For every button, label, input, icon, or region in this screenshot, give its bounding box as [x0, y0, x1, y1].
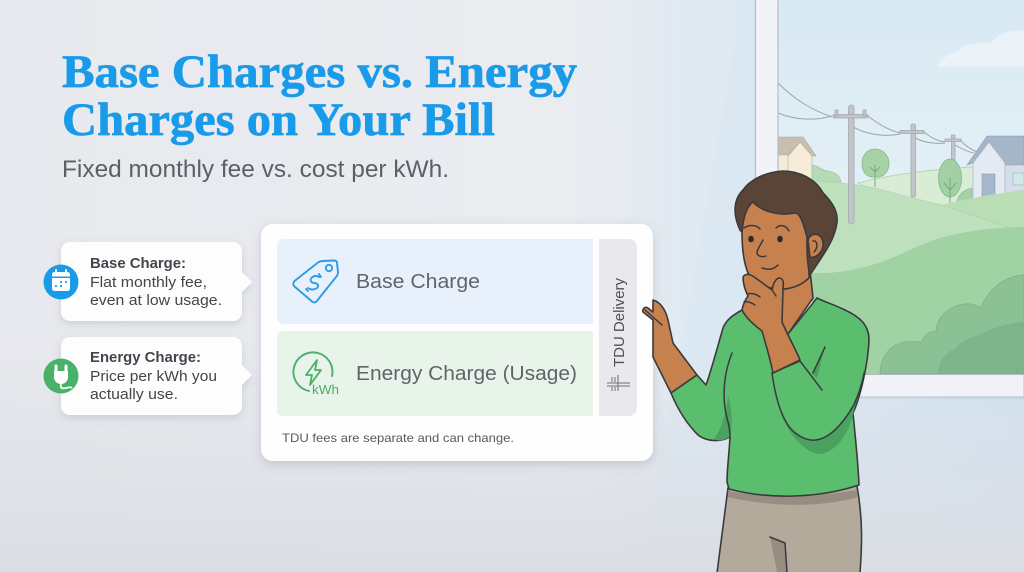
footnote: TDU fees are separate and can change. — [282, 431, 514, 445]
sweater folds — [724, 347, 864, 440]
callout text: Energy Charge: — [90, 350, 201, 366]
title — [62, 46, 578, 146]
mid hill left — [812, 181, 1024, 300]
icon: calendar — [44, 264, 78, 300]
trees and bushes — [812, 149, 972, 203]
callout text: Price per kWh you — [90, 369, 217, 385]
icon: price tag — [293, 260, 338, 302]
trousers — [717, 486, 862, 572]
subtitle: Fixed monthly fee vs. cost per kWh. — [62, 156, 449, 183]
power lines and far poles — [778, 83, 977, 197]
callout text: even at low usage. — [90, 293, 222, 309]
sweater shading — [714, 395, 732, 440]
energy charge label: Energy Charge (Usage) — [356, 363, 577, 385]
hair — [735, 171, 837, 275]
near pole — [833, 105, 868, 224]
foreground bush — [880, 275, 1024, 374]
panel: bill card — [261, 224, 653, 461]
title: Charges on Your Bill — [62, 94, 495, 146]
callout text — [90, 350, 217, 403]
icon: plug — [44, 358, 78, 394]
callout text — [90, 256, 222, 309]
window sill — [778, 374, 1024, 397]
window scene — [756, 0, 1024, 397]
callout text: Flat monthly fee, — [90, 275, 207, 291]
person — [643, 171, 869, 572]
callout text: actually use. — [90, 387, 178, 403]
sweater — [671, 298, 869, 496]
icon: kWh bolt: kWh — [312, 383, 339, 397]
energy charge row — [277, 331, 593, 416]
cloud — [938, 31, 1024, 67]
foreground bush shade — [938, 322, 1024, 374]
base charge label: Base Charge — [356, 271, 480, 293]
neck and raised arm skin — [643, 270, 813, 393]
callout: energy charge — [44, 337, 252, 415]
back hill — [858, 166, 1000, 230]
mid hill right — [942, 190, 1024, 260]
window frame post — [756, 0, 778, 397]
TDU delivery column — [599, 239, 637, 416]
left house — [778, 137, 816, 181]
icon: utility pole — [607, 375, 630, 391]
front hill — [812, 227, 1024, 375]
callout: base charge — [44, 242, 252, 321]
head — [735, 171, 837, 289]
callout text: Base Charge: — [90, 256, 186, 272]
eyes — [748, 236, 783, 242]
ear — [808, 234, 823, 257]
base charge row — [277, 239, 593, 324]
title: Base Charges vs. Energy — [62, 46, 578, 98]
TDU label: TDU Delivery — [612, 277, 628, 367]
forearm and chin hand — [742, 274, 800, 373]
face lines — [744, 226, 789, 269]
icon: kWh bolt — [293, 352, 339, 397]
right house — [967, 136, 1024, 199]
